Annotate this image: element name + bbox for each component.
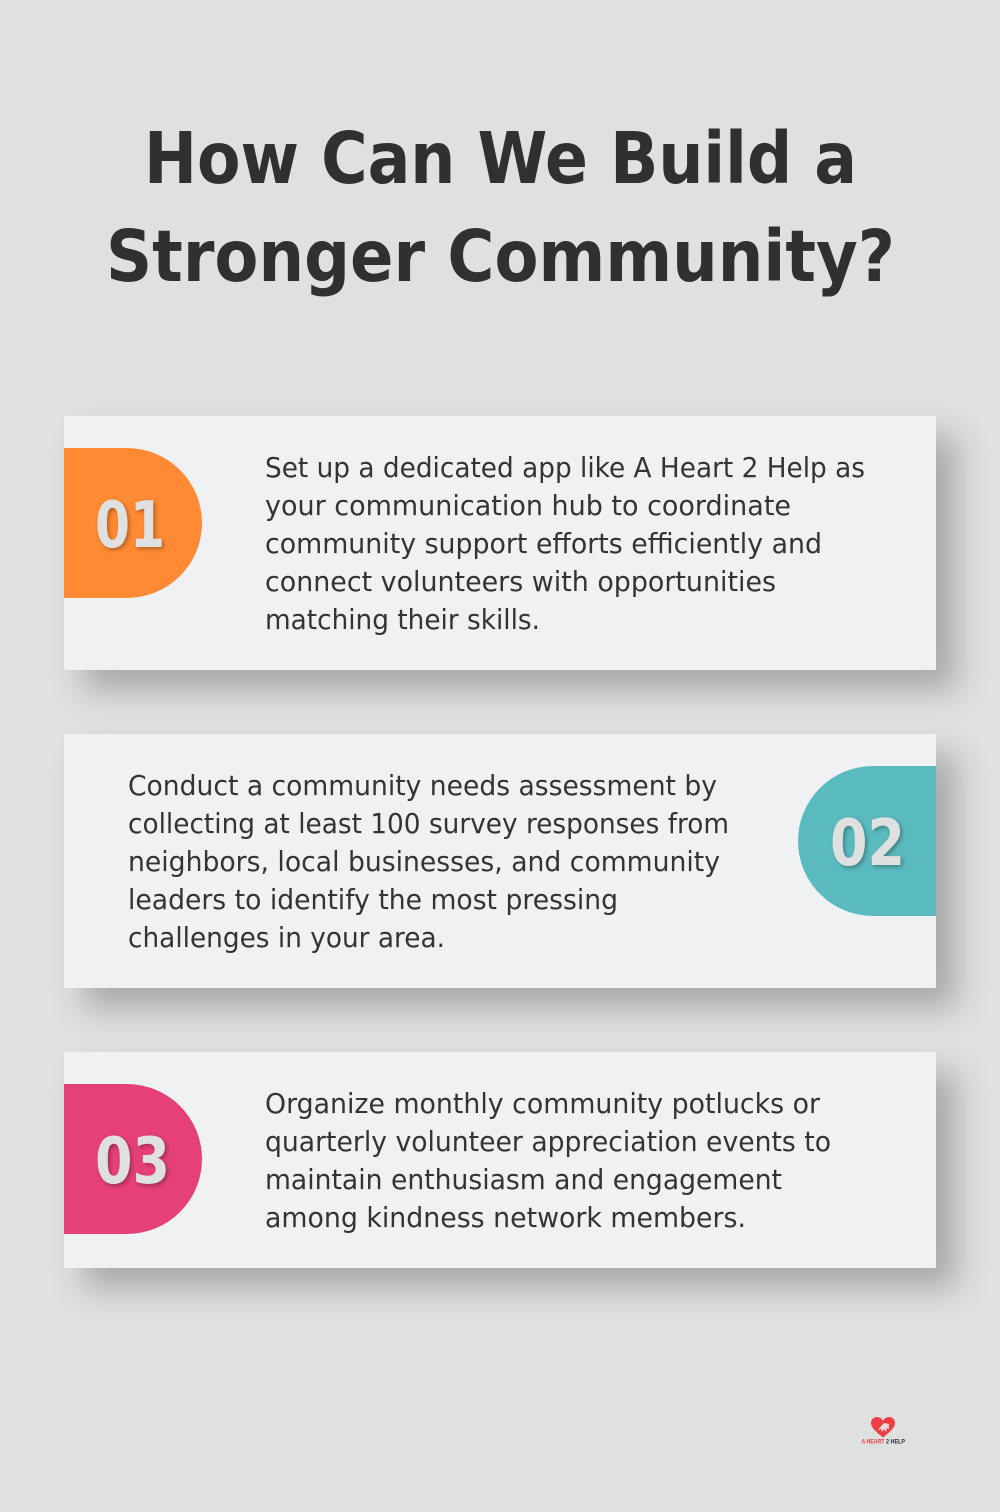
text: step 01 description: connect volunteers with opportunities [265,565,776,598]
text: step 02 description [128,769,729,954]
text: step 02 description: collecting at least 100 survey responses from [128,807,729,840]
panel: step 01 [64,416,936,670]
text: step 01 description: community support efforts efficiently and [265,527,822,560]
title: How Can We Build a [144,117,857,200]
logo wordmark [862,1440,905,1446]
badge: 03 [64,1084,202,1234]
badge: 01: 01 [95,489,165,563]
icon: heart [871,1417,895,1438]
text: step 03 description [265,1087,831,1234]
badge: 01 [64,448,202,598]
text: step 01 description: your communication hub to coordinate [265,489,791,522]
text: step 02 description: Conduct a community needs assessment by [128,769,717,802]
badge: 02 [798,766,936,916]
text: step 02 description: neighbors, local businesses, and community [128,845,720,878]
logo wordmark: A HEART [862,1440,885,1446]
text: step 03 description: maintain enthusiasm and engagement [265,1163,782,1196]
title: Stronger Community? [106,215,895,298]
panel: step 02 [64,734,936,988]
text: step 01 description: matching their skills. [265,603,540,636]
text: step 01 description: Set up a dedicated app like A Heart 2 Help as [265,451,865,484]
text: step 02 description: challenges in your area. [128,921,445,954]
badge: 02: 02 [830,807,905,881]
title [106,117,895,298]
text: step 03 description: quarterly volunteer appreciation events to [265,1125,831,1158]
text: step 01 description [265,451,865,636]
text: step 03 description: Organize monthly community potlucks or [265,1087,820,1120]
badge: 03: 03 [95,1125,170,1199]
text: step 03 description: among kindness network members. [265,1201,746,1234]
panel: step 03 [64,1052,936,1268]
text: step 02 description: leaders to identify the most pressing [128,883,618,916]
logo: A Heart 2 Help [862,1417,905,1446]
logo wordmark: 2 HELP [886,1440,905,1446]
